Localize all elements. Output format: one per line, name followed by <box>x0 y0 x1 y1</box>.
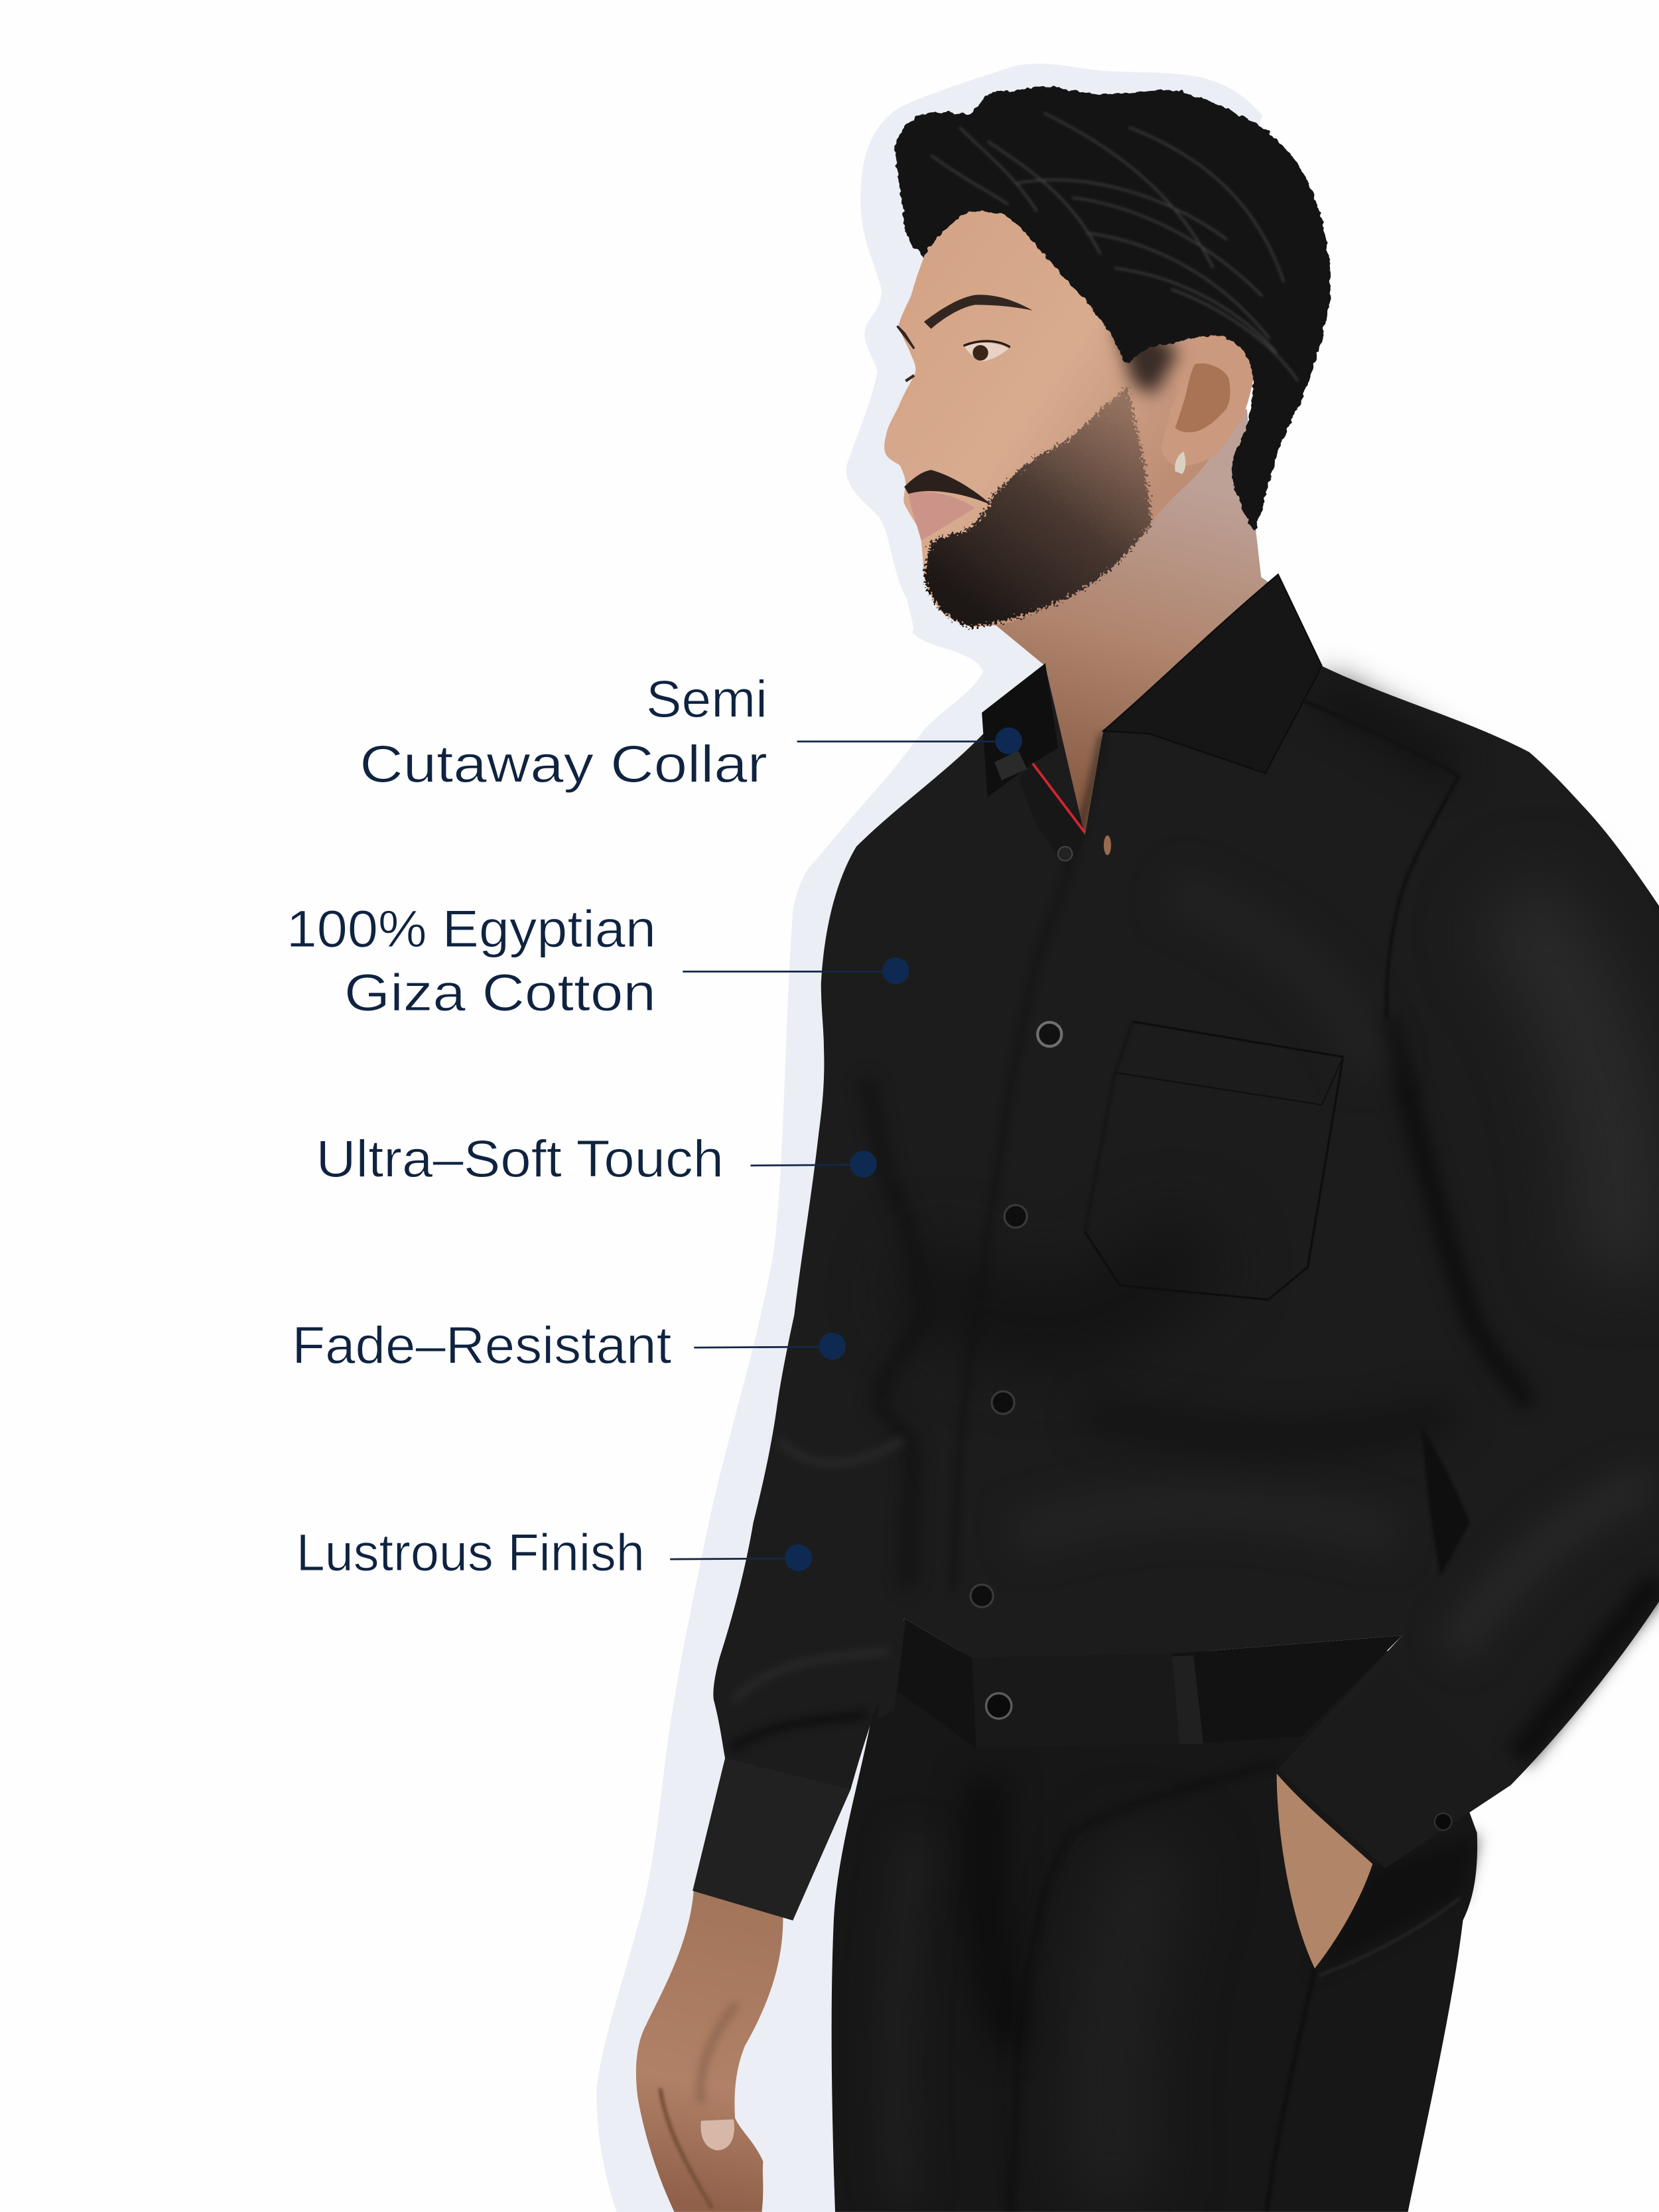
right sleeve cuff <box>1278 1663 1511 1868</box>
waistband button <box>986 1693 1012 1718</box>
model: man wearing black shirt <box>636 87 1659 2212</box>
hair <box>894 87 1331 531</box>
label: Semi Cutaway Collar <box>360 669 767 793</box>
ear and earring <box>1161 332 1254 474</box>
right sleeve highlight <box>1510 903 1623 1270</box>
label: 100% Egyptian Giza Cotton: Giza Cotton <box>344 963 656 1022</box>
label: 100% Egyptian Giza Cotton: 100% Egyptian <box>287 900 656 958</box>
trousers shading <box>897 1762 1477 2211</box>
chest pocket <box>1085 1022 1343 1300</box>
label: Semi Cutaway Collar: Cutaway Collar <box>360 734 767 793</box>
sleeve and torso shadow left <box>866 1078 925 1588</box>
sleeve and torso shadow right <box>1387 1019 1529 1404</box>
trousers <box>832 1651 1477 2212</box>
label: 100% Egyptian Giza Cotton <box>287 900 656 1022</box>
callout: Semi Cutaway Collar <box>360 669 1022 793</box>
left collar leaf <box>982 663 1058 797</box>
sideburn <box>1114 322 1178 395</box>
lips and moustache <box>904 470 992 541</box>
left sleeve creases <box>779 1439 903 1463</box>
lower chest shade <box>1087 1411 1453 1438</box>
right collar leaf <box>1103 575 1322 774</box>
side belt loop <box>878 1620 905 1718</box>
upper torso highlight <box>1171 889 1376 1072</box>
inner collar band <box>1018 764 1085 872</box>
callout: Fade-Resistant <box>292 1316 846 1374</box>
pocket hand <box>1277 1773 1372 1969</box>
left sleeve cuff <box>693 1758 850 1921</box>
torso side vent <box>1422 1428 1470 1576</box>
waistband tab <box>972 1654 1179 1748</box>
eye and brow <box>897 295 1033 381</box>
left hand <box>636 1885 783 2212</box>
shirt body <box>693 666 1659 1921</box>
belt band <box>878 1618 1402 1748</box>
collar button <box>1058 847 1072 861</box>
shirt buttons <box>970 1022 1061 1607</box>
shirt collar <box>982 575 1322 872</box>
hair strands <box>931 113 1298 381</box>
callout: Fade-Resistant: Fade–Resistant <box>292 1316 671 1374</box>
callout: Ultra-Soft Touch: Ultra–Soft Touch <box>316 1130 724 1188</box>
neck <box>973 409 1284 835</box>
label: Semi Cutaway Collar: Semi <box>646 669 767 728</box>
shoulder seam <box>1305 701 1459 1019</box>
callout: Lustrous Finish: Lustrous Finish <box>297 1523 645 1582</box>
belt loop <box>1172 1655 1203 1744</box>
right forearm highlight <box>1453 1482 1650 1651</box>
lower torso highlight <box>1016 1506 1396 1538</box>
red contrast piping <box>1033 764 1085 833</box>
collar button hole <box>1104 835 1111 855</box>
chest shadow <box>917 1242 1199 1326</box>
shirt placket edge <box>953 734 1103 1592</box>
beard <box>924 387 1151 626</box>
shoulder shade <box>1319 691 1453 774</box>
face <box>884 176 1244 626</box>
collar tab <box>994 750 1027 780</box>
callout: Lustrous Finish <box>297 1523 812 1582</box>
silhouette halo behind model <box>596 64 1262 2212</box>
shirt shadows and highlights <box>731 691 1659 1757</box>
callout: 100% Egyptian Giza Cotton <box>287 900 909 1022</box>
callout: Ultra-Soft Touch <box>316 1130 877 1188</box>
